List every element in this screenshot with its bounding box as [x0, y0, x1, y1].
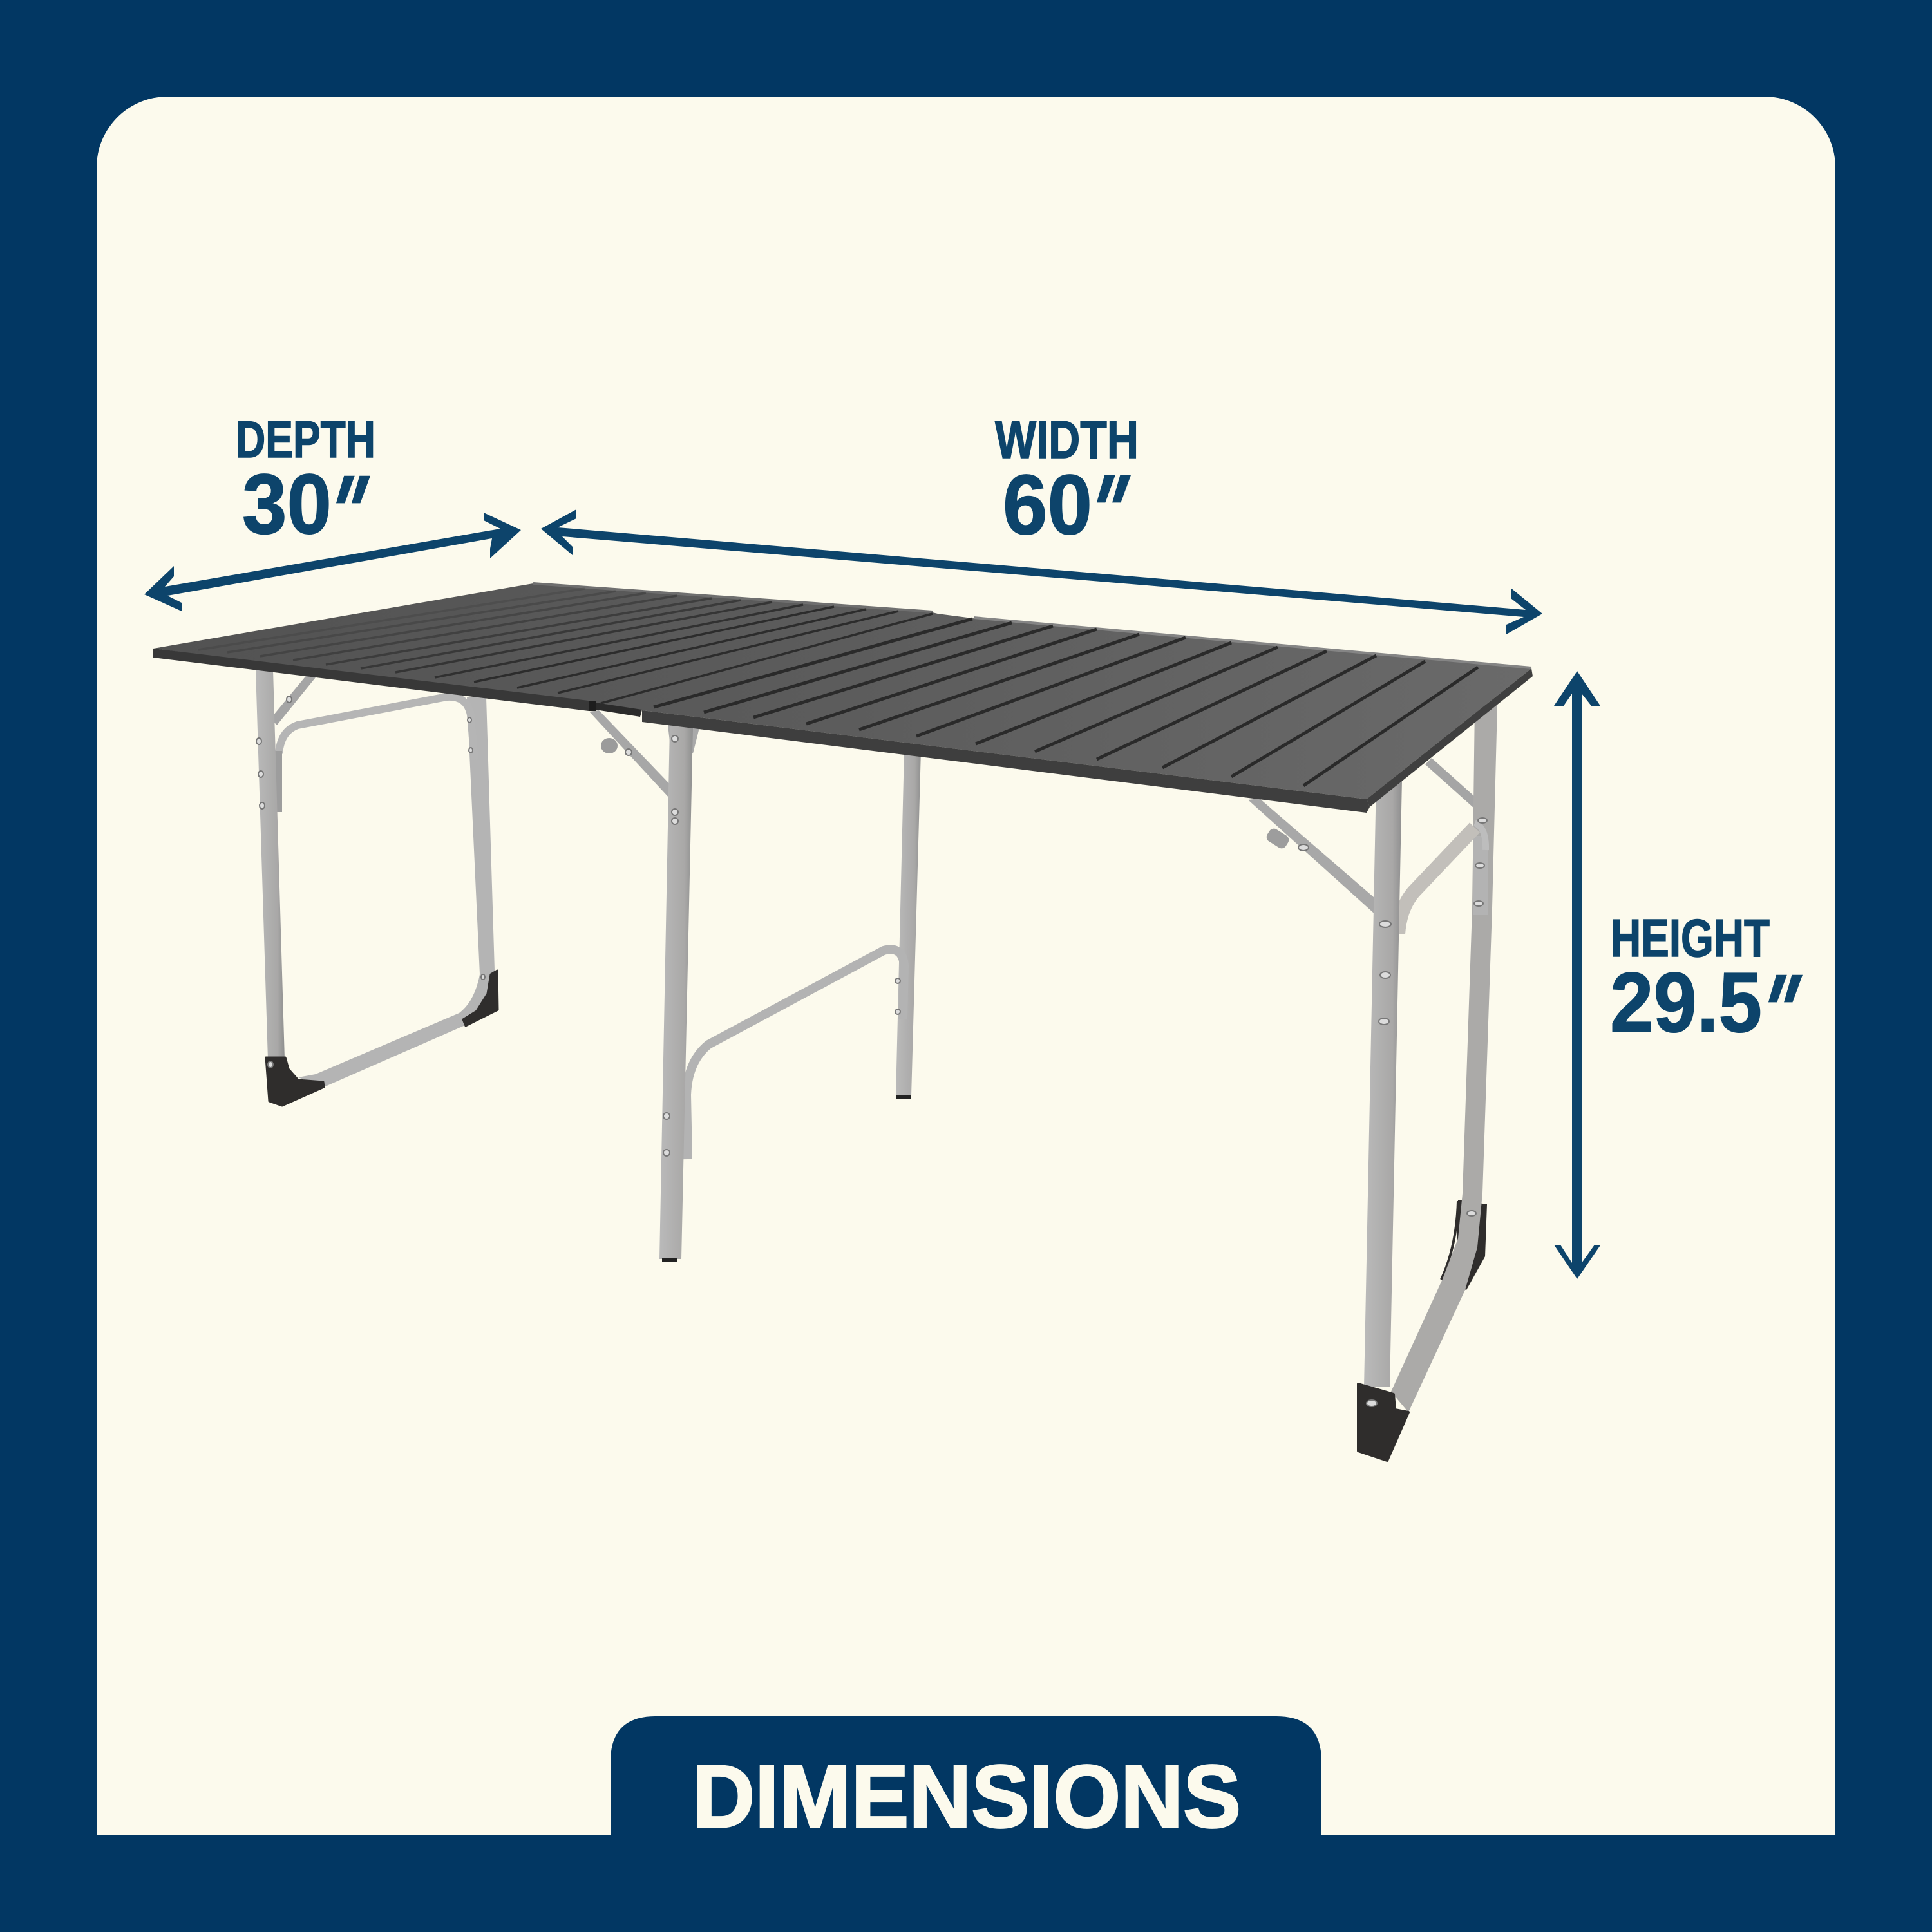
illustration: folding table: [153, 583, 1533, 1461]
label: height: 29.5: [1610, 955, 1762, 1050]
slats: right panel: [654, 619, 1478, 786]
label: width: [995, 410, 1142, 571]
title: dimensions: DIMENSIONS: [692, 1747, 1241, 1846]
label: depth: ": [308, 453, 382, 572]
label: width: WIDTH: [995, 410, 1139, 469]
label: depth: 30: [242, 457, 332, 551]
table top: [153, 583, 1533, 813]
arrow: height: [1554, 671, 1601, 1279]
far right rear leg: [1391, 705, 1497, 1412]
arrow: width: [541, 509, 1542, 634]
title tab: [611, 1716, 1321, 1846]
label: width: ": [1069, 453, 1142, 571]
near right leg frame: [1248, 779, 1486, 1461]
label: depth: [236, 411, 382, 572]
label: height: ": [1741, 952, 1814, 1071]
bolts: [256, 696, 1487, 1406]
far legs: centre frame: [589, 710, 921, 1262]
label: height: HEIGHT: [1611, 908, 1770, 968]
arrow: depth: [144, 513, 521, 611]
label: height: [1610, 908, 1814, 1071]
far legs: left-end frame: [256, 670, 498, 1106]
label: width: 60: [1003, 457, 1092, 552]
slats: left panel: [198, 589, 933, 703]
label: depth: DEPTH: [236, 411, 375, 469]
